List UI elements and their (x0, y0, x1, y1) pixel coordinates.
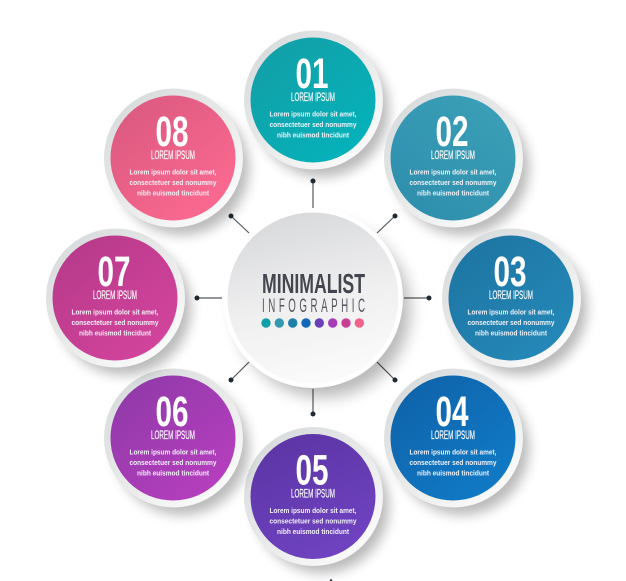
panel: step 06: nibh euismod tincidunt (137, 468, 209, 478)
panel: step 02: LOREM IPSUM (431, 148, 475, 162)
panel: step 01 (244, 30, 389, 177)
panel: step 08: LOREM IPSUM (151, 148, 195, 162)
connector: top right (377, 214, 398, 233)
panel: step 03: nibh euismod tincidunt (475, 328, 547, 338)
panel: step 02: Lorem ipsum dolor sit amet, (410, 168, 496, 176)
panel: step 03: LOREM IPSUM (489, 288, 533, 302)
panel: step 07: nibh euismod tincidunt (79, 328, 151, 338)
panel: step 01: 01 (296, 50, 328, 98)
panel: step 05: LOREM IPSUM (291, 486, 335, 500)
panel: step 08: consectetuer sed nonummy (130, 178, 217, 187)
panel: step 02: nibh euismod tincidunt (417, 188, 489, 198)
panel: step 03: consectetuer sed nonummy (468, 318, 555, 327)
panel: step 08: Lorem ipsum dolor sit amet, (130, 168, 216, 176)
panel: step 03 (442, 228, 587, 375)
connector: bottom (310, 389, 316, 416)
panel: step 04: 04 (436, 388, 469, 436)
panel: step 07: Lorem ipsum dolor sit amet, (72, 308, 158, 316)
panel: step 05: 05 (296, 446, 328, 494)
panel: step 05 (244, 427, 389, 573)
panel: step 07 (46, 228, 191, 375)
panel: step 04: LOREM IPSUM (431, 428, 475, 442)
panel: center hub (223, 208, 410, 397)
panel: step 01: consectetuer sed nonummy (270, 120, 357, 129)
panel: step 02: 02 (436, 108, 468, 156)
color dots legend (261, 318, 364, 328)
panel: step 05: consectetuer sed nonummy (270, 516, 357, 526)
connector: bottom right (377, 362, 398, 382)
panel: step 02: consectetuer sed nonummy (410, 178, 497, 187)
panel: step 08: 08 (156, 108, 188, 156)
panel: step 06 (104, 368, 249, 515)
panel: step 01: Lorem ipsum dolor sit amet, (270, 110, 356, 118)
connector: right (404, 296, 432, 300)
connector: left (194, 296, 222, 300)
title: INFOGRAPHIC (262, 296, 365, 317)
panel: step 02 (384, 88, 529, 235)
title (262, 268, 365, 317)
panel: step 05: nibh euismod tincidunt (277, 527, 349, 536)
panel: step 06: 06 (156, 388, 188, 436)
panel: step 06: LOREM IPSUM (151, 428, 195, 442)
panel: step 07: consectetuer sed nonummy (72, 318, 159, 327)
panel: step 04: Lorem ipsum dolor sit amet, (410, 448, 496, 456)
panel: step 07: LOREM IPSUM (93, 288, 137, 302)
panel: step 03: Lorem ipsum dolor sit amet, (468, 308, 554, 316)
panel: step 05: Lorem ipsum dolor sit amet, (270, 506, 356, 515)
panel: step 03: 03 (494, 248, 526, 296)
panel: step 08: nibh euismod tincidunt (137, 188, 209, 198)
panel: step 08 (104, 88, 249, 235)
panel: step 01: nibh euismod tincidunt (277, 130, 349, 140)
panel: step 04 (384, 368, 529, 515)
panel: step 04: nibh euismod tincidunt (417, 468, 489, 478)
connector: top left (228, 214, 249, 233)
panel: step 04: consectetuer sed nonummy (410, 458, 497, 467)
panel: step 07: 07 (98, 248, 130, 296)
title: MINIMALIST (262, 268, 365, 299)
panel: step 01: LOREM IPSUM (291, 90, 335, 104)
bottom edge mark (330, 579, 332, 581)
connector: top (310, 178, 316, 208)
panel: step 06: consectetuer sed nonummy (130, 458, 217, 467)
panel: step 06: Lorem ipsum dolor sit amet, (130, 448, 216, 456)
connector: bottom left (228, 362, 249, 382)
